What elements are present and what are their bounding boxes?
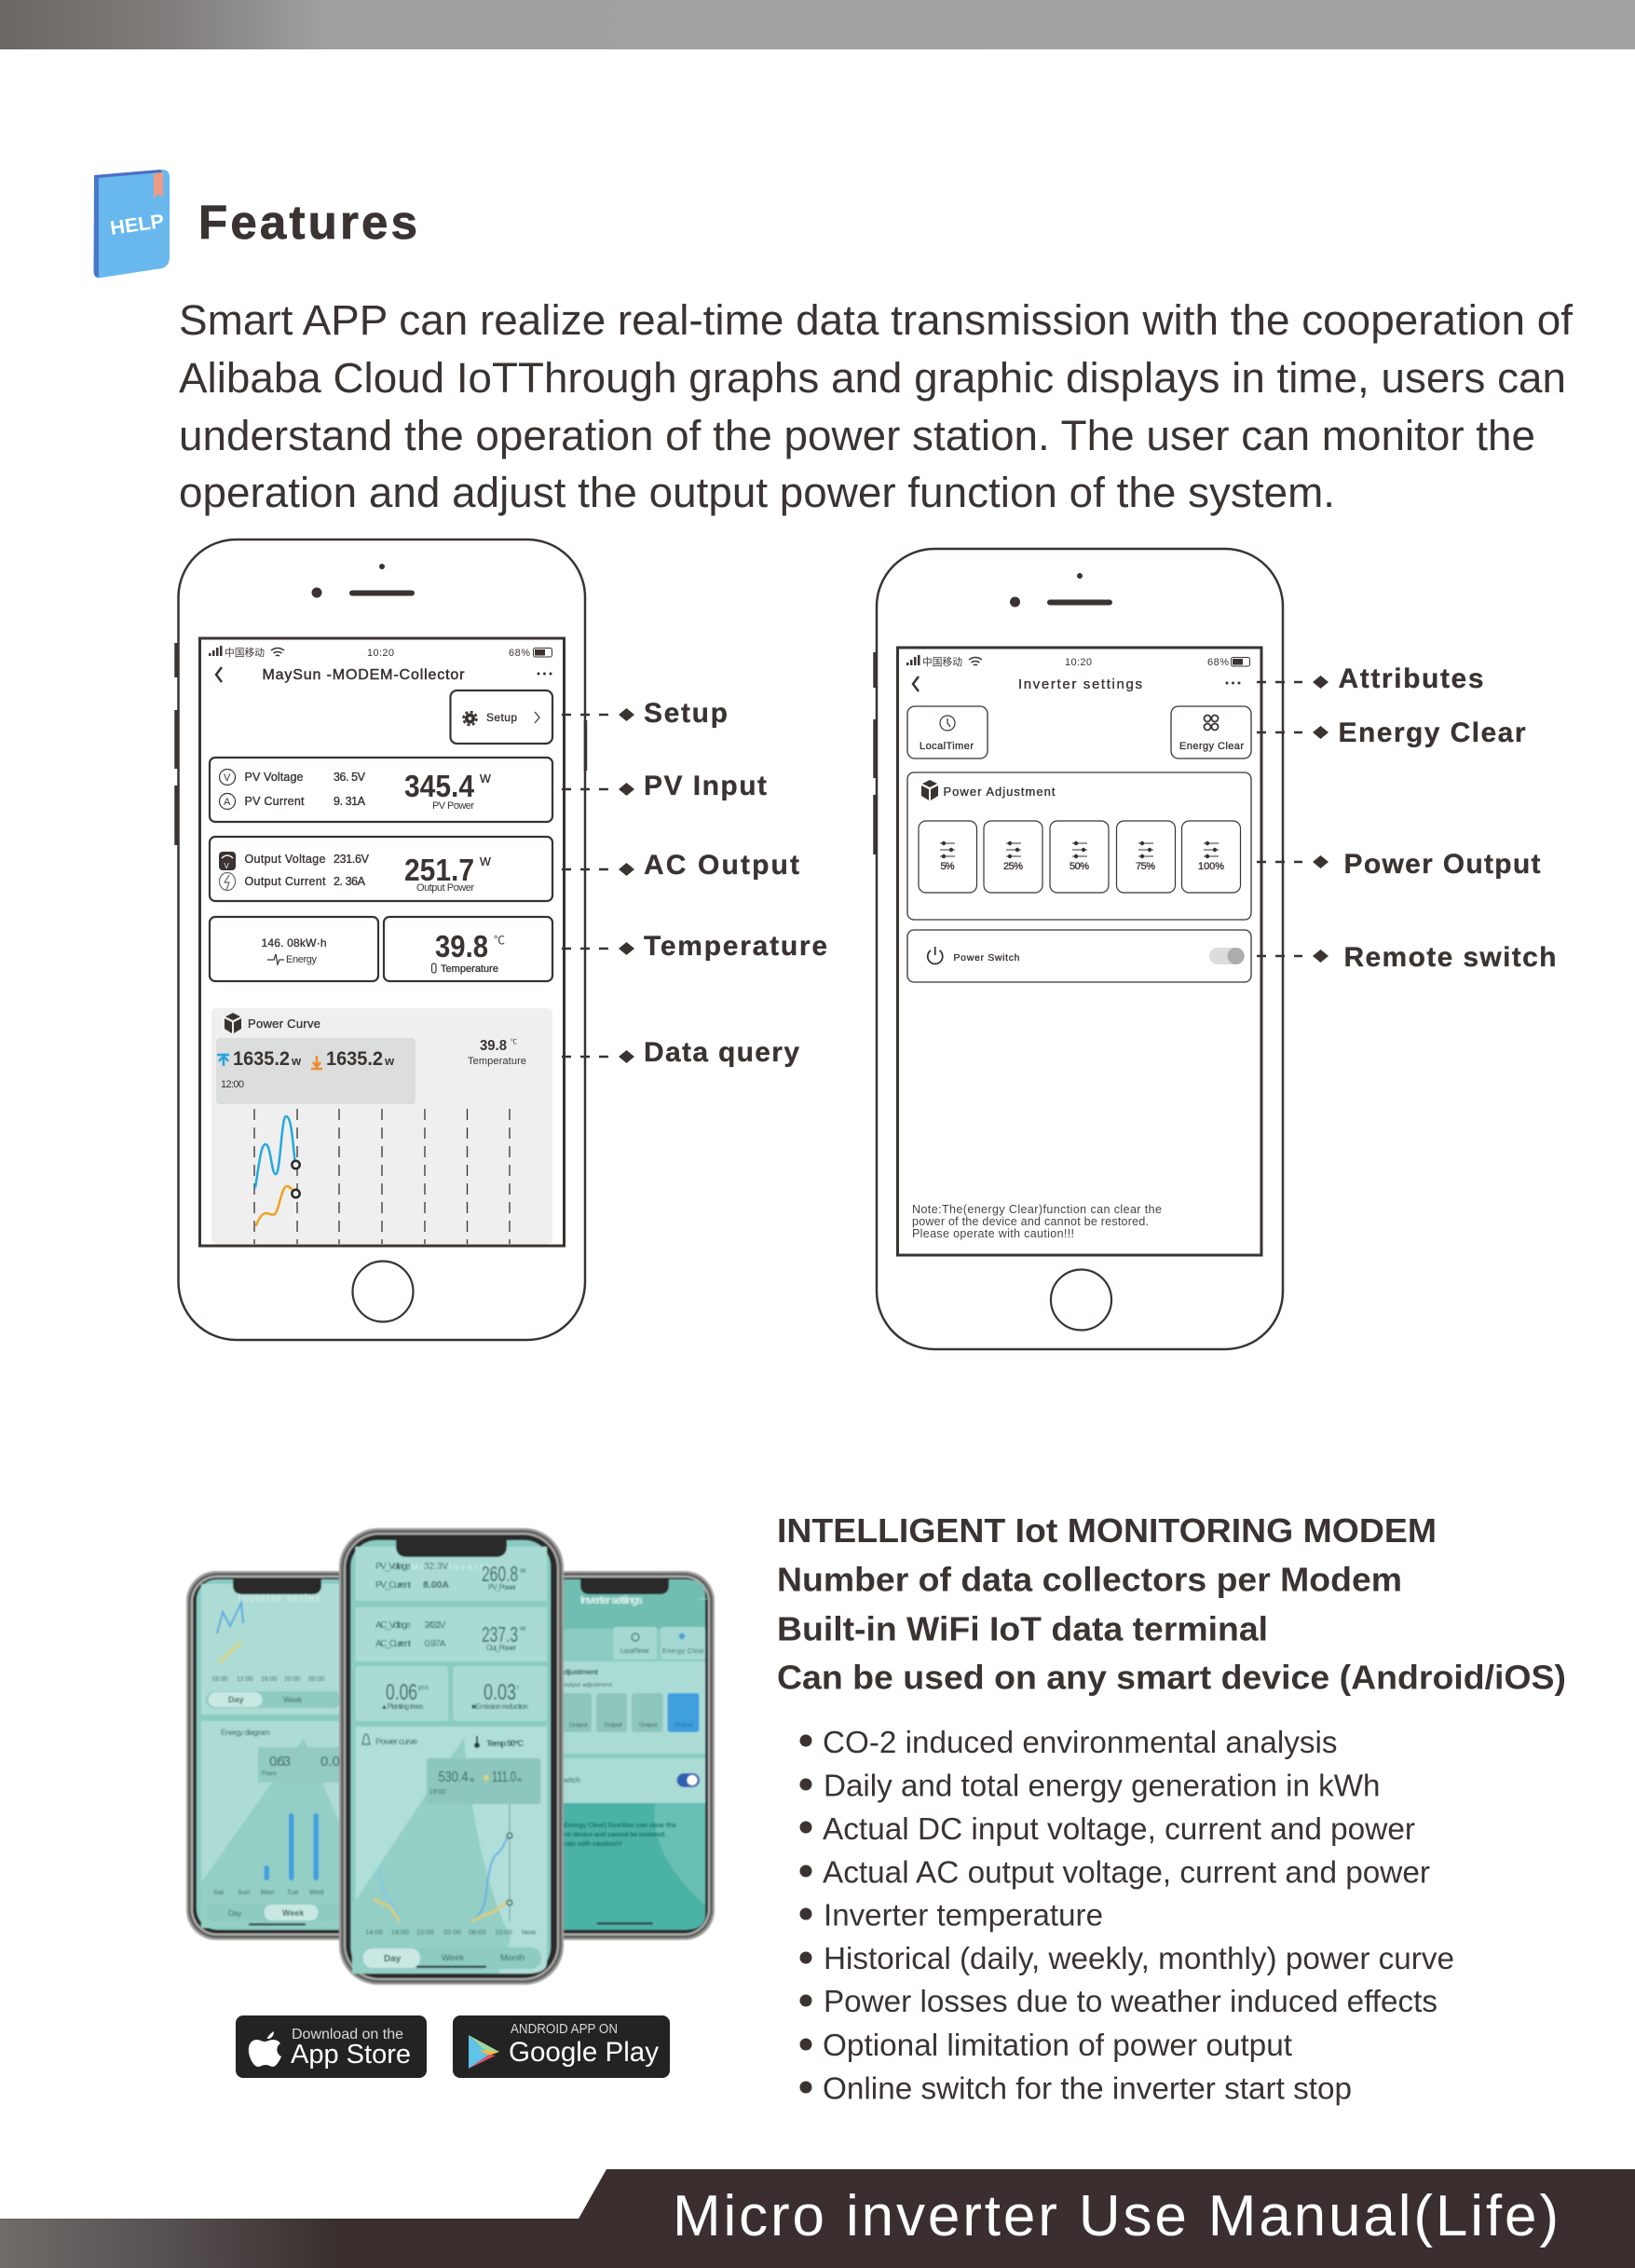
card: temperature: Temperature	[441, 963, 498, 975]
footer band with title: Micro inverter Use Manual(Life)	[673, 2184, 1559, 2248]
left phone: Thurs	[261, 1770, 277, 1777]
center phone cards	[352, 1547, 547, 1974]
button: 25%	[984, 821, 1042, 893]
left phone: Tue	[287, 1888, 299, 1896]
right phone: Energy Clear) function can clear the	[564, 1821, 676, 1829]
status bar: 10:20	[1065, 657, 1092, 668]
callout: Temperature	[562, 931, 827, 962]
right phone: Energy Clear	[662, 1648, 705, 1655]
card: PV input: PV Current	[244, 795, 305, 808]
note text: Note:The(energy Clear)function can clear the	[912, 1203, 1162, 1216]
center phone readouts: PV_Power	[488, 1583, 516, 1592]
center phone readouts: Micro Inverter	[411, 1563, 496, 1573]
nav bar title: MaySun -MODEM-Collector	[263, 667, 465, 683]
left phone: Sun	[238, 1888, 250, 1896]
right phone: Output	[569, 1722, 588, 1728]
phone 1 body	[176, 540, 585, 1340]
card: PV input: PV Voltage	[244, 771, 304, 784]
phone 1: monitoring screen	[176, 540, 585, 1340]
callout: Remote switch: Remote switch	[1343, 942, 1556, 973]
button: 5%	[919, 821, 976, 893]
data tooltip: 1635.2	[233, 1048, 290, 1070]
callout: AC Output: AC Output	[644, 850, 799, 881]
note text: Please operate with caution!!!	[912, 1227, 1074, 1240]
left phone: 18:00	[211, 1676, 228, 1683]
left phone	[186, 1571, 373, 1940]
center phone chart: w	[469, 1777, 475, 1783]
phone 2 body	[875, 549, 1283, 1349]
card: AC output	[210, 837, 552, 901]
callout: Energy Clear: Energy Clear	[1338, 717, 1526, 748]
center phone chart: 18:00	[391, 1928, 409, 1936]
status bar: 中国移动	[225, 647, 265, 659]
icon: help book	[93, 170, 170, 278]
badge: App Store	[236, 2015, 427, 2078]
card: PV input: 345.4	[404, 769, 475, 803]
app mockup: three phones	[186, 1528, 715, 1985]
icon: play triangle	[469, 2035, 499, 2069]
setup button: Setup	[486, 711, 517, 724]
panel: power switch	[907, 930, 1251, 982]
data tooltip: w	[384, 1054, 395, 1068]
icon: cube	[921, 780, 938, 800]
center phone tabs: Day	[384, 1954, 402, 1964]
center phone chart: 22:00	[416, 1928, 434, 1936]
bullet: limitation: Optional limitation of power output	[823, 2028, 1292, 2062]
feature headings: Can be used on any smart device (Android/iOS)	[777, 1659, 1566, 1696]
center phone tabs	[361, 1947, 541, 1969]
feature headings	[777, 1511, 1566, 1696]
center phone readouts: PV_Current	[375, 1579, 411, 1591]
nav bar title	[913, 676, 1241, 692]
center phone readouts: 0.97A	[425, 1638, 445, 1649]
right phone: ···	[698, 1593, 708, 1605]
intro paragraph: operation and adjust the output power function of the system.	[179, 469, 1335, 516]
callout: Attributes	[1257, 663, 1483, 694]
button: 50%	[1050, 821, 1109, 893]
callout: Setup	[562, 698, 728, 729]
button: 25%: 25%	[1003, 861, 1023, 872]
status bar: 中国移动	[922, 656, 962, 668]
card: PV input: W	[480, 772, 491, 786]
feature headings: Built-in WiFi IoT data terminal	[777, 1610, 1268, 1647]
data tooltip: w	[291, 1054, 302, 1068]
left phone: Week	[282, 1908, 305, 1918]
center phone chart: 530.4	[438, 1769, 469, 1785]
panel: power curve: Power Curve	[248, 1017, 320, 1031]
right phone: rate with caution!!!	[564, 1839, 622, 1848]
temperature readout: ℃	[511, 1038, 517, 1045]
status bar: 10:20	[367, 648, 394, 659]
card: temperature	[384, 917, 552, 981]
button: 5%: 5%	[941, 861, 955, 872]
top gradient bar	[0, 0, 1635, 49]
status bar: 68%	[1207, 657, 1229, 668]
button: energy clear	[1171, 706, 1251, 758]
card: AC output: 231.6V	[334, 853, 370, 866]
icon: help book: HELP	[109, 211, 166, 239]
status bar: 68%	[509, 648, 530, 659]
center phone chart: 111.0	[492, 1769, 516, 1785]
left phone: 12:00	[237, 1676, 253, 1683]
center phone readouts: pcs	[418, 1685, 429, 1691]
center phone chart: Now	[522, 1928, 537, 1936]
data tooltip: 1635.2	[326, 1048, 383, 1070]
button: 100%: 100%	[1198, 861, 1224, 872]
center phone readouts: 8.00A	[423, 1579, 449, 1591]
left phone: 0.0	[320, 1754, 340, 1769]
button: 100%	[1181, 821, 1241, 893]
right phone: output adjustment	[564, 1682, 612, 1688]
feature headings: INTELLIGENT Iot MONITORING MODEM	[777, 1511, 1437, 1550]
nav bar title: Inverter settings	[1018, 676, 1142, 692]
center phone readouts: ■Emission reduction	[471, 1702, 528, 1711]
card: PV input: 9. 31A	[334, 795, 366, 808]
center phone	[339, 1528, 564, 1985]
phone 2: inverter settings screen	[875, 549, 1283, 1349]
panel: power adjustment: Power Adjustment	[943, 785, 1056, 799]
card: AC output: W	[480, 855, 491, 868]
card: AC output: V	[224, 862, 229, 870]
temperature readout: Temperature	[468, 1056, 526, 1067]
callout: Data query	[562, 1037, 799, 1068]
button: 50%: 50%	[1070, 861, 1089, 872]
center phone readouts: W	[520, 1626, 526, 1633]
center phone readouts: 237.3	[482, 1622, 518, 1646]
status bar	[209, 646, 552, 659]
right phone	[531, 1571, 715, 1940]
callout: Attributes: Attributes	[1338, 663, 1483, 694]
power curve chart	[254, 1109, 510, 1244]
intro paragraph: understand the operation of the power station. The user can monitor the	[179, 412, 1535, 459]
callout: Energy Clear	[1257, 717, 1526, 748]
left phone: Wed	[309, 1888, 323, 1896]
card: AC output: Output Voltage	[244, 853, 326, 866]
badge: App Store: App Store	[291, 2040, 411, 2070]
center phone readouts: AC_Voltage	[375, 1619, 411, 1631]
button: local timer	[907, 706, 988, 758]
right phone: Output	[674, 1722, 693, 1728]
icon: cube	[225, 1013, 241, 1033]
nav bar title	[216, 667, 552, 683]
button: energy clear: Energy Clear	[1179, 741, 1244, 752]
card: AC output: 251.7	[404, 853, 474, 887]
data tooltip: 12:00	[221, 1079, 244, 1090]
panel: power curve	[211, 1008, 552, 1244]
heading: Features: Features	[198, 196, 417, 249]
left phone: 16:00	[261, 1676, 278, 1683]
right phone: Output	[639, 1722, 658, 1728]
right phone: LocalTimer	[620, 1648, 650, 1655]
center phone readouts: 243.1V	[425, 1619, 445, 1631]
data tooltip	[216, 1038, 416, 1104]
left phone: 0.63	[269, 1754, 291, 1769]
center phone readouts: 0.06	[386, 1680, 417, 1705]
left phone: Day	[228, 1909, 241, 1918]
center phone tabs: Month	[500, 1953, 525, 1963]
temperature readout	[468, 1038, 526, 1067]
intro paragraph	[179, 296, 1573, 516]
center phone readouts: AC_Current	[375, 1638, 411, 1649]
left phone: Energy diagram	[221, 1728, 270, 1737]
card: PV input: PV Power	[432, 800, 474, 812]
card: PV input: V	[224, 772, 231, 784]
bullet: AC output: Actual AC output voltage, current and power	[823, 1855, 1430, 1890]
left phone: 00:00	[308, 1676, 325, 1683]
center phone tabs: Week	[442, 1953, 464, 1963]
center phone readouts	[362, 1562, 528, 1749]
card: AC output: 2. 36A	[334, 875, 366, 888]
icon: apple	[249, 2031, 281, 2067]
feature bullet list	[799, 1725, 1454, 2106]
center phone readouts: 32.3V	[424, 1562, 448, 1572]
note text	[912, 1203, 1162, 1240]
left phone: Mon	[261, 1888, 275, 1896]
center phone chart: 10:00	[495, 1928, 512, 1936]
card: energy: 146. 08kW·h	[261, 936, 326, 950]
card: energy	[210, 917, 378, 981]
center phone readouts: Power curve	[375, 1737, 417, 1747]
right phone: Output	[604, 1722, 622, 1728]
badge: App Store: Download on the	[292, 2027, 403, 2043]
badge: Google Play: Google Play	[509, 2037, 659, 2068]
badge: Google Play	[453, 2015, 670, 2078]
card: PV input	[210, 758, 552, 822]
center phone chart: 14:00	[365, 1928, 383, 1936]
right phone: witch	[563, 1776, 580, 1784]
bullet: energy generation: Daily and total energy generation in kWh	[824, 1768, 1381, 1802]
center phone readouts: Out_Power	[486, 1644, 516, 1652]
left phone: Week	[283, 1696, 303, 1704]
right phone: djustment	[564, 1667, 598, 1676]
center phone readouts: ▲Planting trees	[380, 1702, 423, 1711]
center phone readouts: Temp 50°C	[486, 1739, 524, 1749]
intro paragraph: Smart APP can realize real-time data transmission with the cooperation of	[179, 296, 1573, 344]
feature headings: Number of data collectors per Modem	[777, 1560, 1402, 1599]
button: 75%: 75%	[1136, 861, 1155, 872]
left phone: Day	[228, 1695, 244, 1704]
card: AC output: Output Power	[416, 882, 474, 894]
card: temperature: 39.8	[435, 929, 488, 963]
button: local timer: LocalTimer	[920, 741, 974, 752]
temperature readout: 39.8	[480, 1038, 507, 1054]
left phone: Sat	[213, 1888, 225, 1896]
center phone chart: 19:00	[429, 1789, 446, 1796]
badge: Google Play: ANDROID APP ON	[511, 2021, 618, 2037]
intro paragraph: Alibaba Cloud IoTThrough graphs and graphic displays in time, users can	[179, 354, 1566, 402]
callout: Power Output	[1257, 849, 1541, 880]
bullet: online switch: Online switch for the inverter start stop	[823, 2071, 1352, 2106]
callout: Temperature: Temperature	[644, 931, 827, 962]
button: 75%	[1116, 821, 1176, 893]
card: PV input: 36. 5V	[334, 771, 366, 784]
center phone chart: 06:00	[469, 1928, 486, 1936]
callout: Data query: Data query	[644, 1037, 799, 1068]
bullet: power losses: Power losses due to weather induced effects	[824, 1984, 1437, 2018]
panel: power switch: Power Switch	[954, 952, 1020, 963]
bullet: power curve: Historical (daily, weekly, monthly) power curve	[824, 1941, 1454, 1975]
callout: AC Output	[562, 850, 799, 881]
panel: power adjustment	[907, 772, 1251, 920]
footer band with title	[0, 2169, 1635, 2268]
card: AC output: Output Current	[244, 875, 326, 888]
card: energy: Energy	[286, 954, 317, 965]
center phone chart	[365, 1758, 540, 1936]
card: PV input: A	[224, 797, 231, 808]
center phone readouts: 0.03	[484, 1680, 516, 1705]
setup button	[451, 690, 552, 744]
left phone: Inverter series	[238, 1592, 320, 1605]
center phone chart: w	[516, 1777, 523, 1783]
status bar	[906, 655, 1250, 668]
callout: Setup: Setup	[644, 698, 728, 729]
left phone: 20:00	[284, 1676, 301, 1683]
right phone: ne device and cannot be restored.	[564, 1830, 666, 1838]
callout: PV Input	[562, 771, 767, 801]
right phone: Inverter settings	[580, 1595, 643, 1606]
callout: PV Input: PV Input	[644, 771, 767, 801]
bullet: temperature: Inverter temperature	[824, 1898, 1103, 1933]
center phone readouts: W	[520, 1568, 526, 1575]
center phone readouts: PV_Voltage	[375, 1562, 411, 1572]
center phone readouts: t	[517, 1685, 519, 1691]
bullet: CO-2: CO-2 induced environmental analysis	[823, 1725, 1338, 1759]
center phone readouts: 260.8	[482, 1562, 518, 1586]
center phone chart: 02:00	[443, 1928, 461, 1936]
card: temperature: ℃	[494, 934, 505, 947]
note text: power of the device and cannot be restored.	[912, 1215, 1149, 1228]
bullet: DC input: Actual DC input voltage, current and power	[823, 1811, 1415, 1846]
callout: Power Output: Power Output	[1343, 849, 1541, 880]
